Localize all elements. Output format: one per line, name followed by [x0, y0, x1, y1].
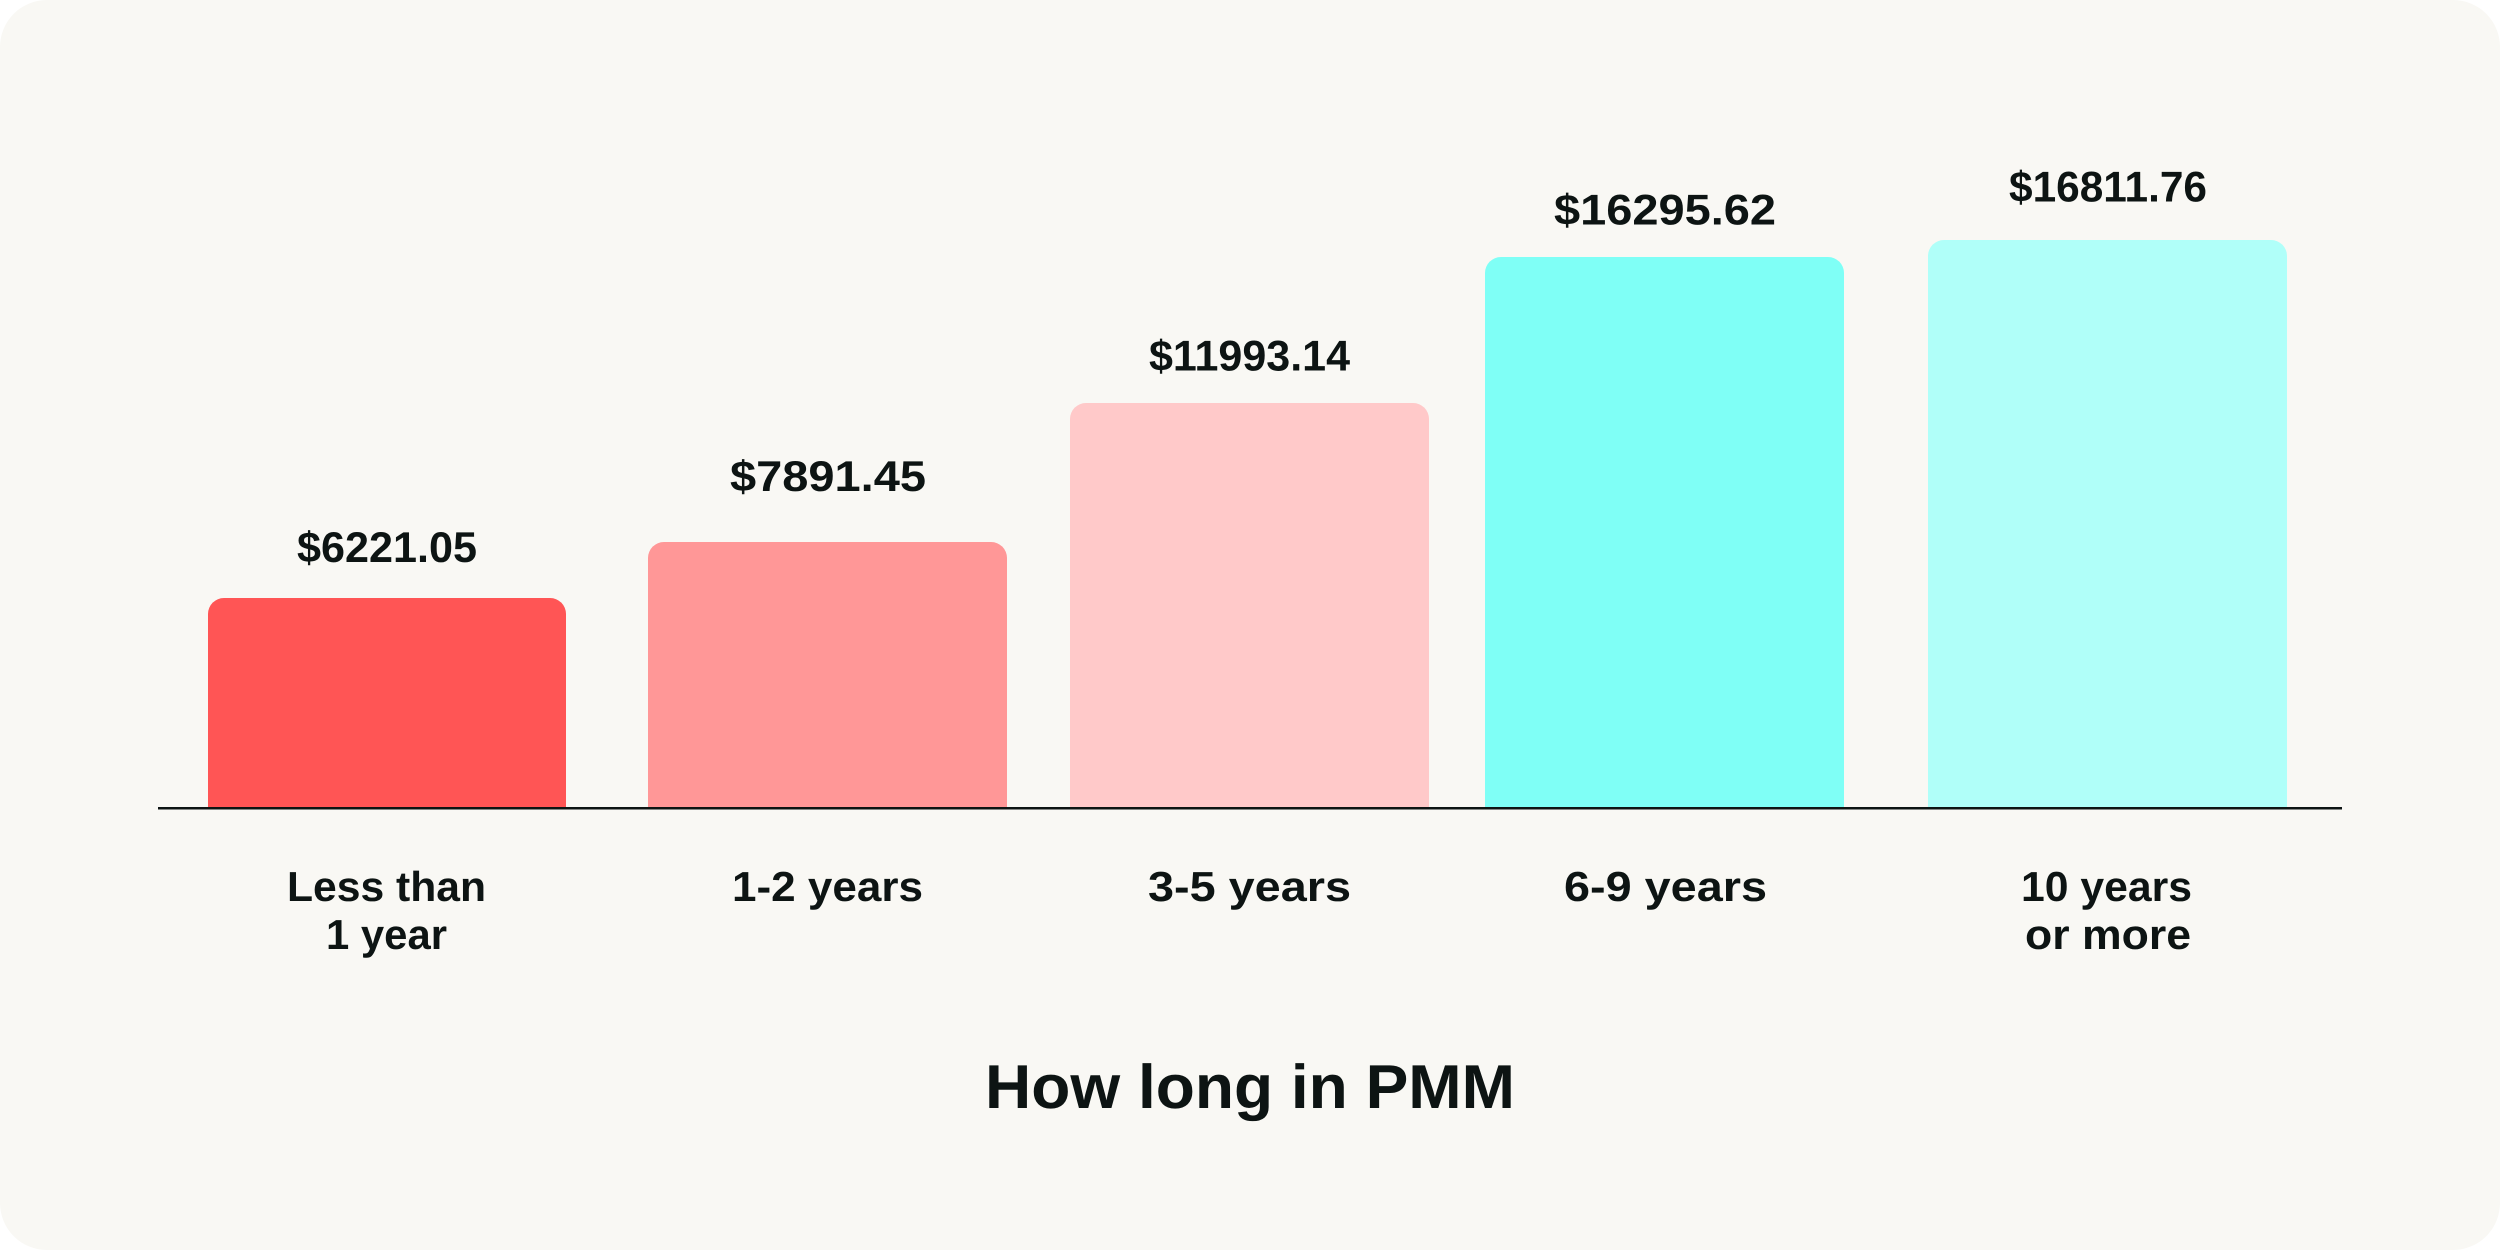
- category label: less than 1 year: Less than: [287, 863, 486, 910]
- category label: 10 years or more: or more: [2025, 911, 2191, 958]
- axis title: How long in PMM: [985, 1053, 1515, 1122]
- axis line: [158, 807, 2342, 810]
- value: 6-9 years: $16295.62: [1554, 186, 1776, 234]
- bar: less than 1 year: [208, 598, 566, 808]
- category label: 10 years or more: [2021, 863, 2192, 958]
- bar chart: [158, 164, 2342, 958]
- category label: 6-9 years: 6-9 years: [1564, 863, 1767, 910]
- bar: 3-5 years: [1070, 403, 1429, 808]
- value: 10 years or more: $16811.76: [2009, 164, 2207, 212]
- bar: 1-2 years: [648, 542, 1007, 808]
- category label: 10 years or more: 10 years: [2021, 863, 2192, 910]
- category label: less than 1 year: [287, 863, 486, 958]
- bar: 6-9 years: [1485, 257, 1844, 808]
- value: less than 1 year: $6221.05: [297, 524, 477, 572]
- value: 1-2 years: $7891.45: [730, 453, 926, 501]
- category label: less than 1 year: 1 year: [326, 911, 447, 958]
- category label: 1-2 years: 1-2 years: [732, 863, 923, 910]
- value: 3-5 years: $11993.14: [1149, 332, 1350, 380]
- category label: 3-5 years: 3-5 years: [1148, 863, 1351, 910]
- bar: 10 years or more: [1928, 240, 2287, 808]
